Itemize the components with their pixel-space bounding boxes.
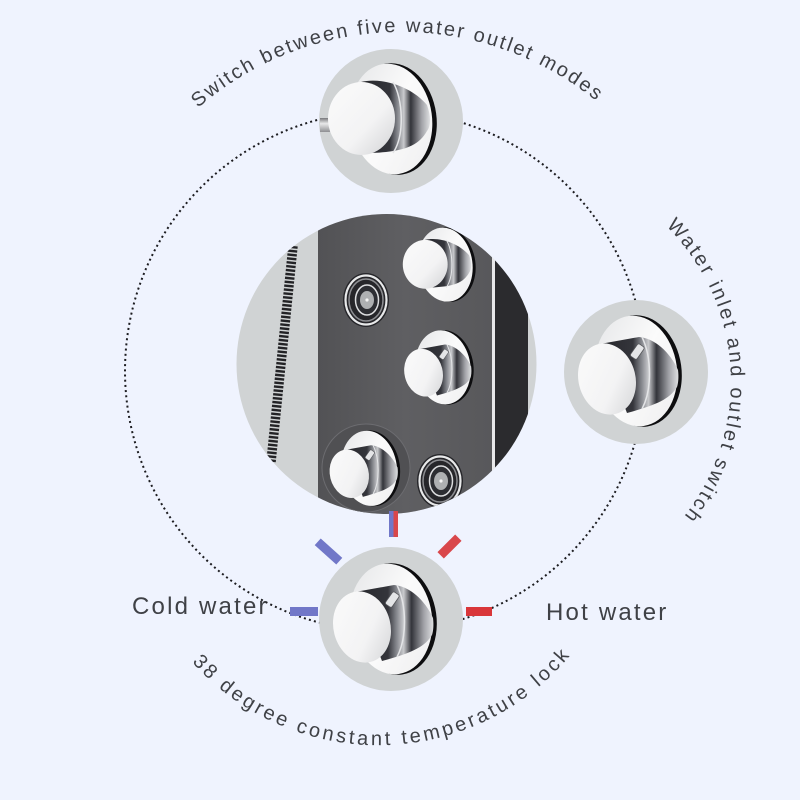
panel side xyxy=(495,260,528,468)
badge: temperature knob xyxy=(319,547,463,691)
button: upper xyxy=(343,273,389,327)
knob: upper xyxy=(402,227,476,302)
panel face xyxy=(318,210,492,520)
panel edge highlight xyxy=(492,258,495,470)
cold bar left xyxy=(290,607,318,616)
knob: middle xyxy=(404,330,474,405)
hot bar right xyxy=(466,607,492,616)
knob: lower xyxy=(330,430,400,506)
temperature marks xyxy=(290,511,492,616)
cold bar diagonal xyxy=(315,538,342,565)
photo backdrop xyxy=(230,210,540,520)
curved caption: temperature lock: 38 degree constant temperature lock xyxy=(194,649,570,746)
hot bar diagonal xyxy=(437,534,462,559)
badge: five-mode switch xyxy=(319,49,463,193)
curved caption: inlet outlet: Water inlet and outlet switch xyxy=(669,216,746,520)
knob: lower halo xyxy=(322,424,410,512)
button: lower xyxy=(417,454,463,508)
badge: inlet outlet switch xyxy=(564,300,708,444)
center photo: shower panel xyxy=(230,210,540,520)
curved caption: five modes: Switch between five water outlet modes xyxy=(192,19,601,106)
label: cold water: Cold water xyxy=(132,593,269,620)
shower hose xyxy=(271,246,293,462)
center bar xyxy=(389,511,398,537)
label: hot water: Hot water xyxy=(546,599,669,626)
dotted ring xyxy=(125,111,645,631)
